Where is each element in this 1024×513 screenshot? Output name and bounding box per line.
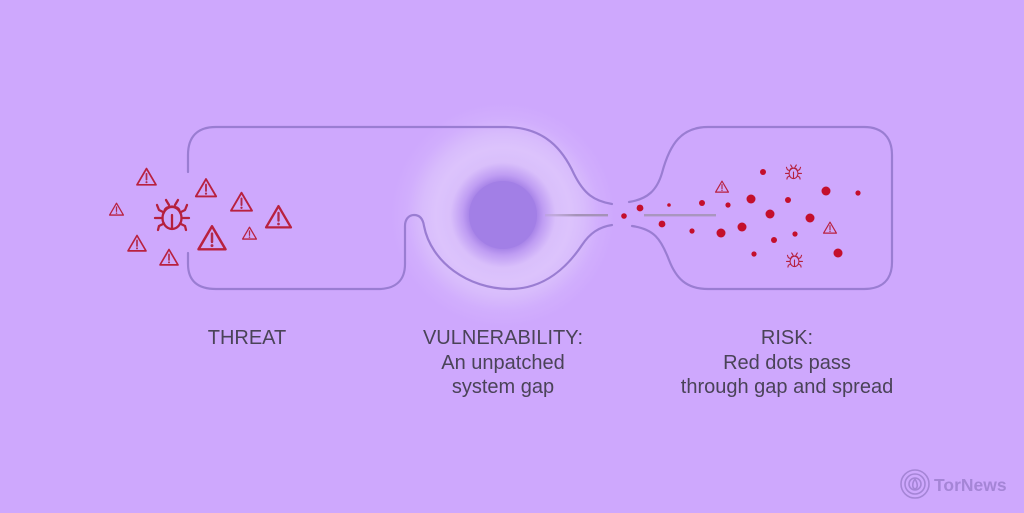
- icon: warning 6: [198, 226, 226, 249]
- label: vulnerability: system gap: [452, 376, 554, 398]
- icon: bug bottom: [786, 253, 802, 267]
- vulnerability glow: [391, 103, 615, 327]
- threat icons: [110, 169, 291, 265]
- icon: warning left: [716, 181, 728, 192]
- risk spread dots: [621, 169, 861, 258]
- label: risk: Red dots pass: [723, 352, 851, 374]
- logo: TorNews: [901, 470, 1007, 498]
- icon: warning right: [824, 222, 836, 233]
- risk icons: [716, 165, 836, 267]
- panel: risk chamber outline: [629, 127, 892, 289]
- icon: warning 1: [137, 169, 156, 185]
- icon: warning 7: [243, 227, 256, 239]
- icon: warning 4: [231, 193, 252, 211]
- icon: warning 5: [266, 206, 291, 227]
- icon: logo rings: [901, 470, 929, 498]
- panel: threat and vulnerability chamber outline: [188, 127, 612, 289]
- label: threat: THREAT: [208, 327, 286, 349]
- patch line right: [644, 214, 716, 216]
- icon: bug top: [786, 165, 802, 179]
- icon: warning 8: [128, 236, 146, 251]
- label: risk: through gap and spread: [681, 376, 893, 398]
- icon: warning 3: [196, 179, 216, 196]
- logo wordmark: TorNews: [934, 475, 1007, 495]
- vulnerability circle: [469, 181, 537, 249]
- icon: warning 9: [160, 250, 178, 265]
- patch line left: [545, 214, 608, 216]
- label: vulnerability: VULNERABILITY:: [423, 327, 583, 349]
- label: vulnerability: An unpatched: [441, 352, 565, 374]
- label: risk: RISK:: [761, 327, 813, 349]
- icon: bug: [155, 200, 189, 230]
- icon: warning 2: [110, 203, 123, 215]
